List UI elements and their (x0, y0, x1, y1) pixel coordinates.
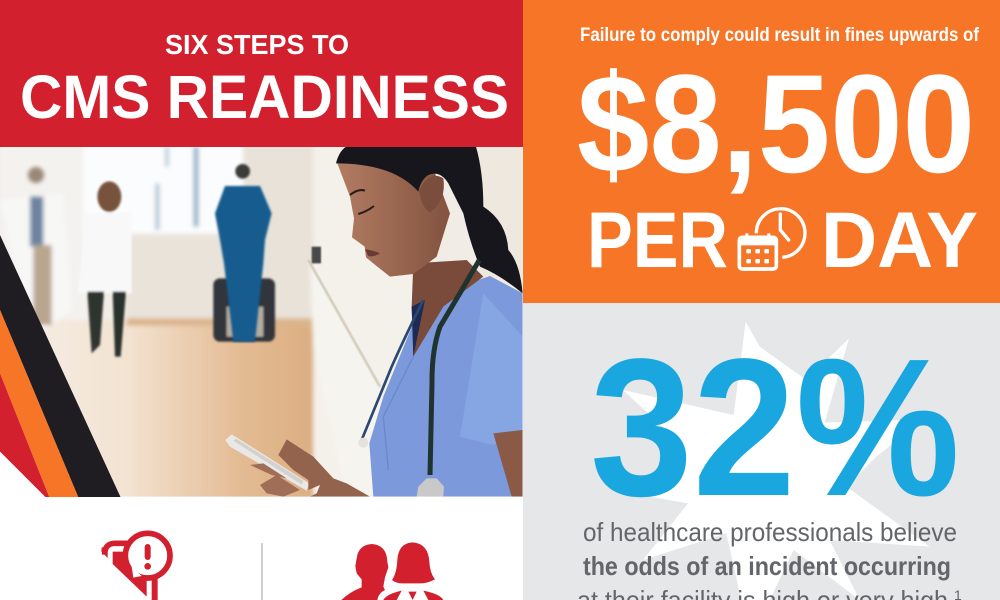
starburst (623, 322, 930, 600)
text: per: PER (587, 195, 728, 284)
panel: title banner (0, 0, 523, 147)
decorative ribbon stripes (0, 235, 121, 497)
figure: 32 percent: 32% (590, 318, 960, 537)
figure: fine amount: $8,500 (577, 45, 975, 202)
corridor background (2, 147, 380, 497)
scrubs (369, 276, 523, 497)
text: the odds of an incident occurring: the odds of an incident occurring (583, 551, 951, 581)
divider (261, 543, 263, 600)
neck and chest (412, 260, 483, 357)
text: day: DAY (821, 195, 978, 284)
blurred people (25, 164, 57, 327)
phone (225, 434, 309, 491)
icon: alert speech bubble (101, 533, 170, 600)
stethoscope (430, 260, 479, 475)
icon: healthcare staff silhouettes (341, 542, 443, 600)
forearm (493, 430, 523, 497)
panel: fines callout (523, 0, 1000, 303)
face (337, 160, 450, 277)
hand (278, 439, 370, 497)
nurse (225, 143, 523, 497)
icon: clock and calendar (739, 209, 805, 269)
heading: six steps to: SIX STEPS TO (165, 29, 349, 60)
panel: incident statistic (523, 303, 1000, 600)
hair (336, 143, 523, 293)
eye and brow (350, 190, 365, 195)
text: of healthcare professionals believe: of healthcare professionals believe (583, 517, 957, 547)
photo: nurse using phone in hospital corridor (0, 143, 523, 500)
rail (308, 247, 380, 387)
heading: CMS readiness: CMS READINESS (20, 63, 509, 131)
panel: white lower section (0, 497, 523, 600)
